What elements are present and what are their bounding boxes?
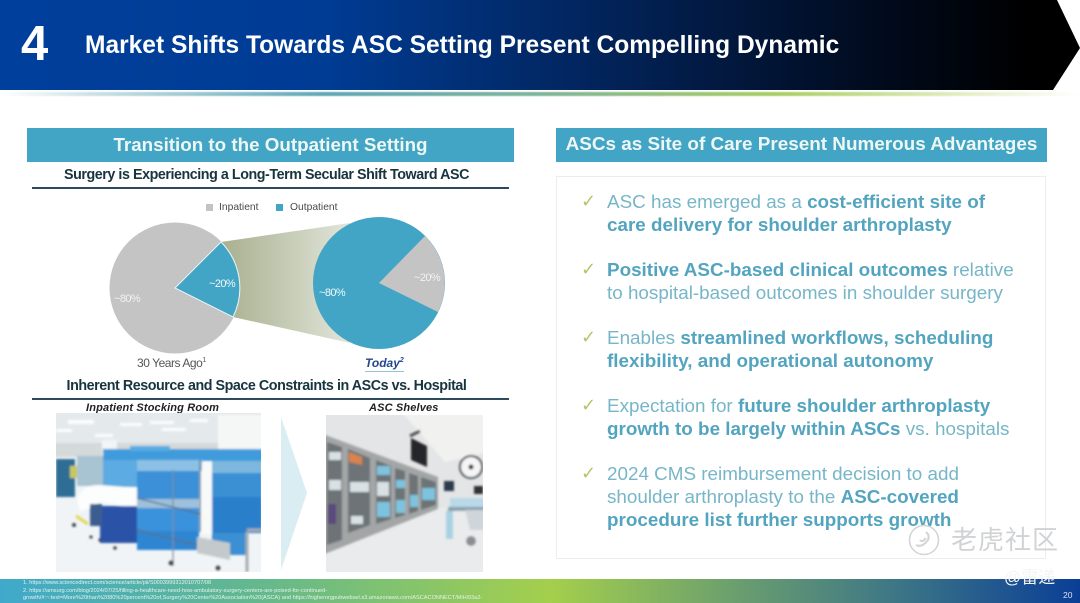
page number: 20 (1063, 590, 1072, 600)
advantage 3: ✓ (581, 327, 596, 348)
connector band (221, 223, 350, 343)
pie label: today: Today2 (365, 356, 404, 370)
pie label: 30 years ago: 30 Years Ago1 (137, 356, 206, 370)
image: inpatient stocking room (56, 413, 261, 572)
footnotes: growth/#:~:text=More%20than%2080%20percent%20of,Surgery%20Center%20Association%20(ASCA) and https://higherorgpubwebsel.s3.amazonaws.com/ASCACONNECT/MiHi93a2- (23, 595, 482, 601)
advantage 5: 2024 CMS reimbursement decision to add (607, 463, 959, 484)
photo caption: inpatient: Inpatient Stocking Room (86, 402, 219, 414)
image: ASC shelves (326, 415, 483, 572)
advantage 4: growth to be largely within ASCs vs. hospitals (607, 418, 1009, 439)
legend: Outpatient (290, 202, 338, 213)
watermark (908, 524, 1059, 556)
advantage 5: procedure list further supports growth (607, 509, 951, 530)
advantage 2: to hospital-based outcomes in shoulder surgery (607, 282, 1003, 303)
pie: today (313, 217, 445, 349)
footnotes (23, 580, 482, 601)
section number: 4 (21, 17, 48, 71)
advantage 5: ✓ (581, 463, 596, 484)
advantage 1 (581, 191, 986, 235)
pie: 30 years ago (110, 222, 240, 354)
pie: today: ~80% (319, 287, 346, 299)
right panel heading (556, 128, 1047, 162)
advantage 1: care delivery for shoulder arthroplasty (607, 214, 952, 235)
advantage 5 (581, 463, 959, 530)
advantage 4: Expectation for future shoulder arthroplasty (607, 395, 990, 416)
advantages card (556, 176, 1046, 559)
advantage 3: flexibility, and operational autonomy (607, 350, 933, 371)
left panel heading: Transition to the Outpatient Setting (113, 134, 428, 155)
advantage 2: Positive ASC-based clinical outcomes relative (607, 259, 1014, 280)
title: Market Shifts Towards ASC Setting Present Compelling Dynamic (85, 32, 839, 59)
right panel heading: ASCs as Site of Care Present Numerous Advantages (566, 134, 1037, 155)
advantage 2: ✓ (581, 259, 596, 280)
advantage 4 (581, 395, 1009, 439)
left panel heading (27, 128, 514, 162)
pie: today: ~20% (414, 272, 441, 284)
panel: ASC advantages (556, 128, 1047, 559)
advantage 2 (581, 259, 1014, 303)
watermark handle: @雷递 (1004, 568, 1055, 587)
pie: 30 years ago: ~80% (114, 293, 141, 305)
photo caption: ASC: ASC Shelves (369, 402, 439, 414)
advantage 5: shoulder arthroplasty to the ASC-covered (607, 486, 959, 507)
subheading: constraints: Inherent Resource and Space Constraints in ASCs vs. Hospital (67, 378, 466, 394)
advantage 3: Enables streamlined workflows, scheduling (607, 327, 993, 348)
legend (206, 202, 338, 213)
footnotes: 1. https://www.sciencedirect.com/science/article/pii/S0003999312010707/08 (23, 580, 211, 586)
watermark: 老虎社区 (951, 525, 1059, 555)
arrow: inpatient to ASC (281, 418, 307, 570)
advantage 1: ✓ (581, 191, 596, 212)
advantage 4: ✓ (581, 395, 596, 416)
subheading: secular shift: Surgery is Experiencing a Long-Term Secular Shift Toward ASC (64, 167, 469, 183)
legend: Inpatient (219, 202, 259, 213)
advantage 3 (581, 327, 993, 371)
pie charts comparison (110, 217, 445, 354)
pie: 30 years ago: ~20% (209, 278, 236, 290)
header banner (0, 0, 1080, 90)
footnotes: 2. https://amsurg.com/blog/2024/07/25/filling-a-healthcare-need-how-ambulatory-surgery-centers-are-poised-for-continued- (23, 588, 327, 594)
advantage 1: ASC has emerged as a cost-efficient site of (607, 191, 985, 212)
footer bar (0, 579, 1080, 603)
